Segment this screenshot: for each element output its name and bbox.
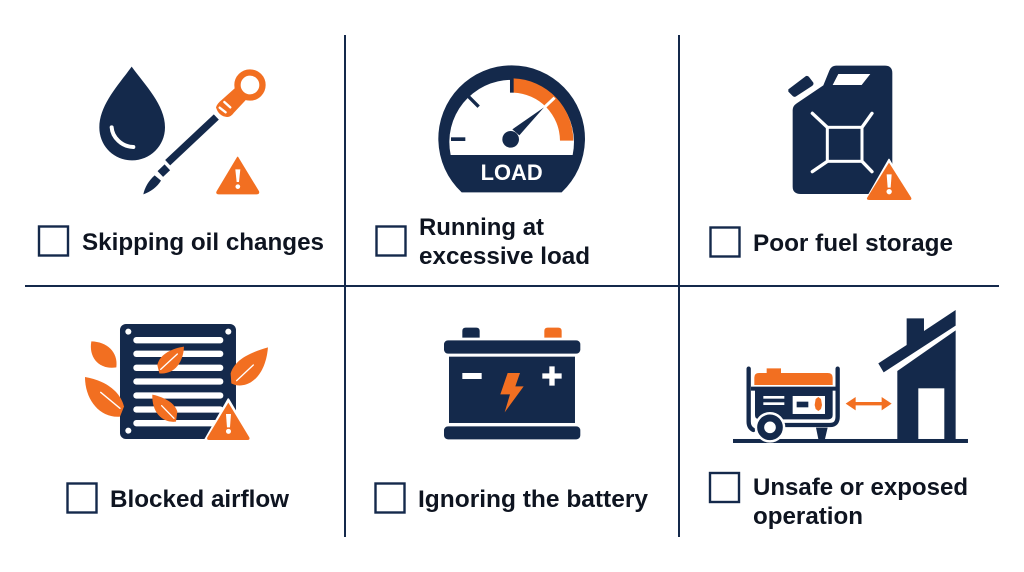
- panel: skipping oil changes: [39, 67, 324, 256]
- icon: generator and house distance: [733, 310, 968, 443]
- icon: oil drop, dipstick and warning: [99, 67, 262, 194]
- panel: running at excessive load: [376, 65, 590, 270]
- label: Poor fuel storage: [753, 230, 953, 257]
- checkbox: [376, 226, 406, 256]
- panel: blocked airflow: [68, 324, 289, 513]
- checkbox: [68, 484, 96, 512]
- checkbox: [710, 473, 739, 502]
- label: Skipping oil changes: [82, 229, 324, 256]
- icon: battery: [444, 328, 580, 439]
- checkbox: [376, 484, 404, 512]
- panel: unsafe or exposed operation: [710, 310, 968, 530]
- icon: load gauge: LOAD: [481, 160, 543, 185]
- icon: jerry can with warning: [788, 66, 914, 202]
- panel: poor fuel storage: [710, 66, 953, 257]
- panel: ignoring the battery: [376, 328, 649, 513]
- label: Ignoring the battery: [418, 486, 649, 513]
- label: operation: [753, 503, 863, 530]
- icon: blocked vent with leaves and warning: [85, 324, 268, 441]
- label: Blocked airflow: [110, 486, 289, 513]
- label: Running at: [419, 214, 544, 241]
- checkbox: [710, 228, 740, 256]
- label: Unsafe or exposed: [753, 474, 968, 501]
- checkbox: [39, 226, 68, 256]
- label: excessive load: [419, 243, 590, 270]
- icon: load gauge: [438, 65, 585, 192]
